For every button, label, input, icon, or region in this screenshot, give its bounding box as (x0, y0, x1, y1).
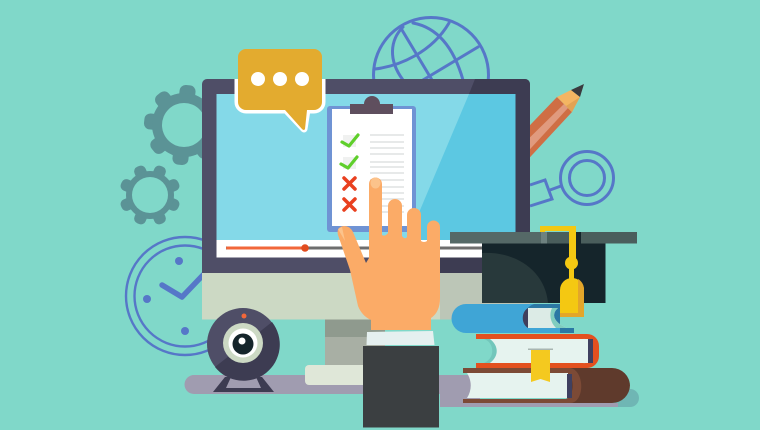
checklist lines (370, 135, 404, 212)
graduation cap (450, 232, 637, 303)
video progress bar (226, 244, 496, 252)
icon: large gear (143, 84, 225, 166)
tassel (540, 226, 584, 317)
monitor screen (216, 94, 516, 258)
hand (338, 178, 440, 330)
clipboard (327, 96, 416, 232)
speech bubble (238, 49, 322, 130)
clipboard clip (350, 96, 393, 114)
icon: globe (374, 18, 488, 132)
green check marks (341, 135, 358, 168)
book shadow end (610, 389, 639, 407)
monitor stand (305, 319, 405, 385)
icon: clock (126, 237, 244, 355)
fingernail (370, 178, 380, 188)
check boxes (343, 135, 356, 169)
icon: pencil (510, 84, 584, 168)
shirt cuff (366, 331, 434, 345)
bookmark (528, 348, 553, 382)
suit sleeve (363, 346, 439, 428)
icon: magnifier (530, 152, 614, 206)
blue book (452, 304, 574, 333)
monitor frame (202, 79, 530, 273)
thumbnail (338, 227, 345, 241)
brown book (463, 368, 630, 403)
orange book (476, 334, 599, 368)
red crosses (344, 178, 355, 210)
webcam (207, 308, 280, 392)
icon: small gear (119, 164, 181, 226)
desk shadow (184, 375, 618, 407)
monitor chin (202, 272, 530, 320)
